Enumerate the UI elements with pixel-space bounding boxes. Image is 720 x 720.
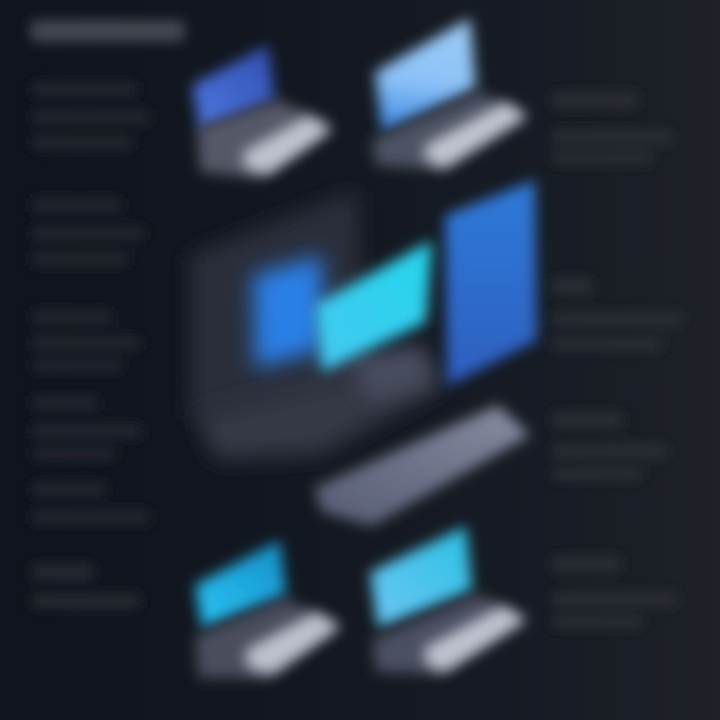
big blue panel xyxy=(445,180,537,386)
text block 2 xyxy=(552,278,682,350)
text block 6 xyxy=(32,564,140,608)
icon: bottom left laptop xyxy=(195,540,340,678)
text block 3 xyxy=(32,310,140,372)
text block 1 xyxy=(552,92,672,164)
panel: right column text xyxy=(552,92,682,628)
text block 1 xyxy=(32,82,150,150)
text block 3 xyxy=(552,412,667,480)
blue screen xyxy=(253,255,322,368)
icon: bottom right laptop xyxy=(370,526,526,674)
icon: keyboard xyxy=(314,405,530,526)
text block 5 xyxy=(32,482,150,524)
text block 4 xyxy=(552,556,677,628)
icon: central laptop with screens xyxy=(190,180,537,460)
panel: left column text xyxy=(30,20,185,608)
text block 4 xyxy=(32,396,142,460)
icon: top left laptop xyxy=(192,45,332,178)
laptop base xyxy=(195,355,445,460)
icon: top right laptop xyxy=(372,18,527,170)
cyan screen xyxy=(315,240,432,372)
monitor body xyxy=(190,190,362,420)
text block 2 xyxy=(32,198,144,266)
heading xyxy=(30,20,185,42)
